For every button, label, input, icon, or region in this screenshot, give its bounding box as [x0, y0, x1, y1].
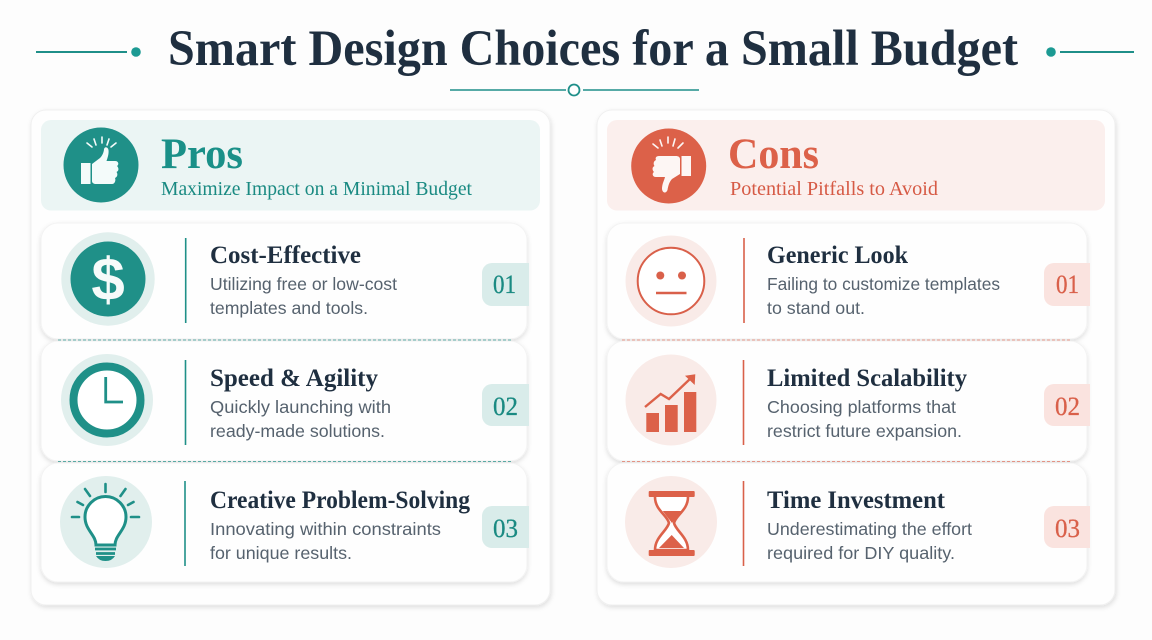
icon: thumbs up: [64, 128, 138, 202]
badge 03: 03: [493, 514, 518, 543]
text block: [210, 487, 470, 563]
cons card 1: [607, 223, 1090, 339]
badge 03: 03: [1055, 514, 1080, 543]
text block: Innovating within constraints: [210, 519, 441, 539]
title: Smart Design Choices for a Small Budget: [168, 21, 1018, 77]
badge 03: [1044, 506, 1090, 548]
badge 02: 02: [493, 392, 518, 421]
badge 01: [1044, 263, 1090, 306]
text block: Creative Problem-Solving: [210, 487, 470, 514]
badge 01: 01: [1056, 270, 1079, 299]
icon: light bulb: [60, 476, 152, 568]
cons header: [607, 120, 1105, 210]
text block: ready-made solutions.: [210, 421, 385, 441]
pros header: [41, 120, 540, 210]
badge 02: [482, 384, 529, 426]
panel: pros: [31, 110, 550, 605]
icon: clock: [61, 354, 153, 446]
text block: Speed & Agility: [210, 365, 378, 392]
text block: [767, 365, 967, 441]
text block: Utilizing free or low-cost: [210, 274, 397, 294]
cons card 2: [607, 341, 1090, 461]
text block: restrict future expansion.: [767, 421, 962, 441]
pros heading: Pros: [161, 131, 243, 178]
text block: Underestimating the effort: [767, 519, 972, 539]
pros card 3: [41, 463, 529, 582]
icon: hourglass: [625, 476, 717, 568]
text block: templates and tools.: [210, 298, 368, 318]
icon: dollar: $: [91, 246, 125, 313]
badge 03: [482, 506, 529, 548]
text block: Generic Look: [767, 242, 908, 269]
title underline: [450, 84, 699, 96]
pros card 1: [41, 223, 529, 339]
badge 01: 01: [493, 270, 516, 299]
text block: required for DIY quality.: [767, 543, 955, 563]
text block: Quickly launching with: [210, 397, 391, 417]
text block: Time Investment: [767, 487, 946, 514]
pros subheading: Maximize Impact on a Minimal Budget: [161, 178, 472, 200]
icon: thumbs down: [631, 128, 706, 204]
cons heading: Cons: [728, 131, 819, 178]
badge 01: [482, 263, 529, 306]
text block: for unique results.: [210, 543, 352, 563]
text block: [210, 242, 397, 318]
title ornament: right: [1046, 47, 1134, 57]
badge 02: 02: [1055, 392, 1080, 421]
text block: Cost-Effective: [210, 242, 361, 269]
pros card 2: [41, 341, 529, 461]
text block: Choosing platforms that: [767, 397, 956, 417]
badge 02: [1044, 384, 1090, 426]
text block: Limited Scalability: [767, 365, 967, 392]
panel: cons: [597, 110, 1115, 605]
text block: [767, 487, 972, 563]
text block: Failing to customize templates: [767, 274, 1000, 294]
text block: [767, 242, 1000, 318]
icon: dollar: [61, 232, 155, 326]
cons card 3: [607, 463, 1090, 582]
text block: [210, 365, 391, 441]
text block: to stand out.: [767, 298, 865, 318]
cons subheading: Potential Pitfalls to Avoid: [730, 178, 938, 200]
title ornament: left: [36, 47, 141, 57]
icon: growth chart: [626, 354, 716, 446]
icon: neutral face: [626, 236, 716, 326]
